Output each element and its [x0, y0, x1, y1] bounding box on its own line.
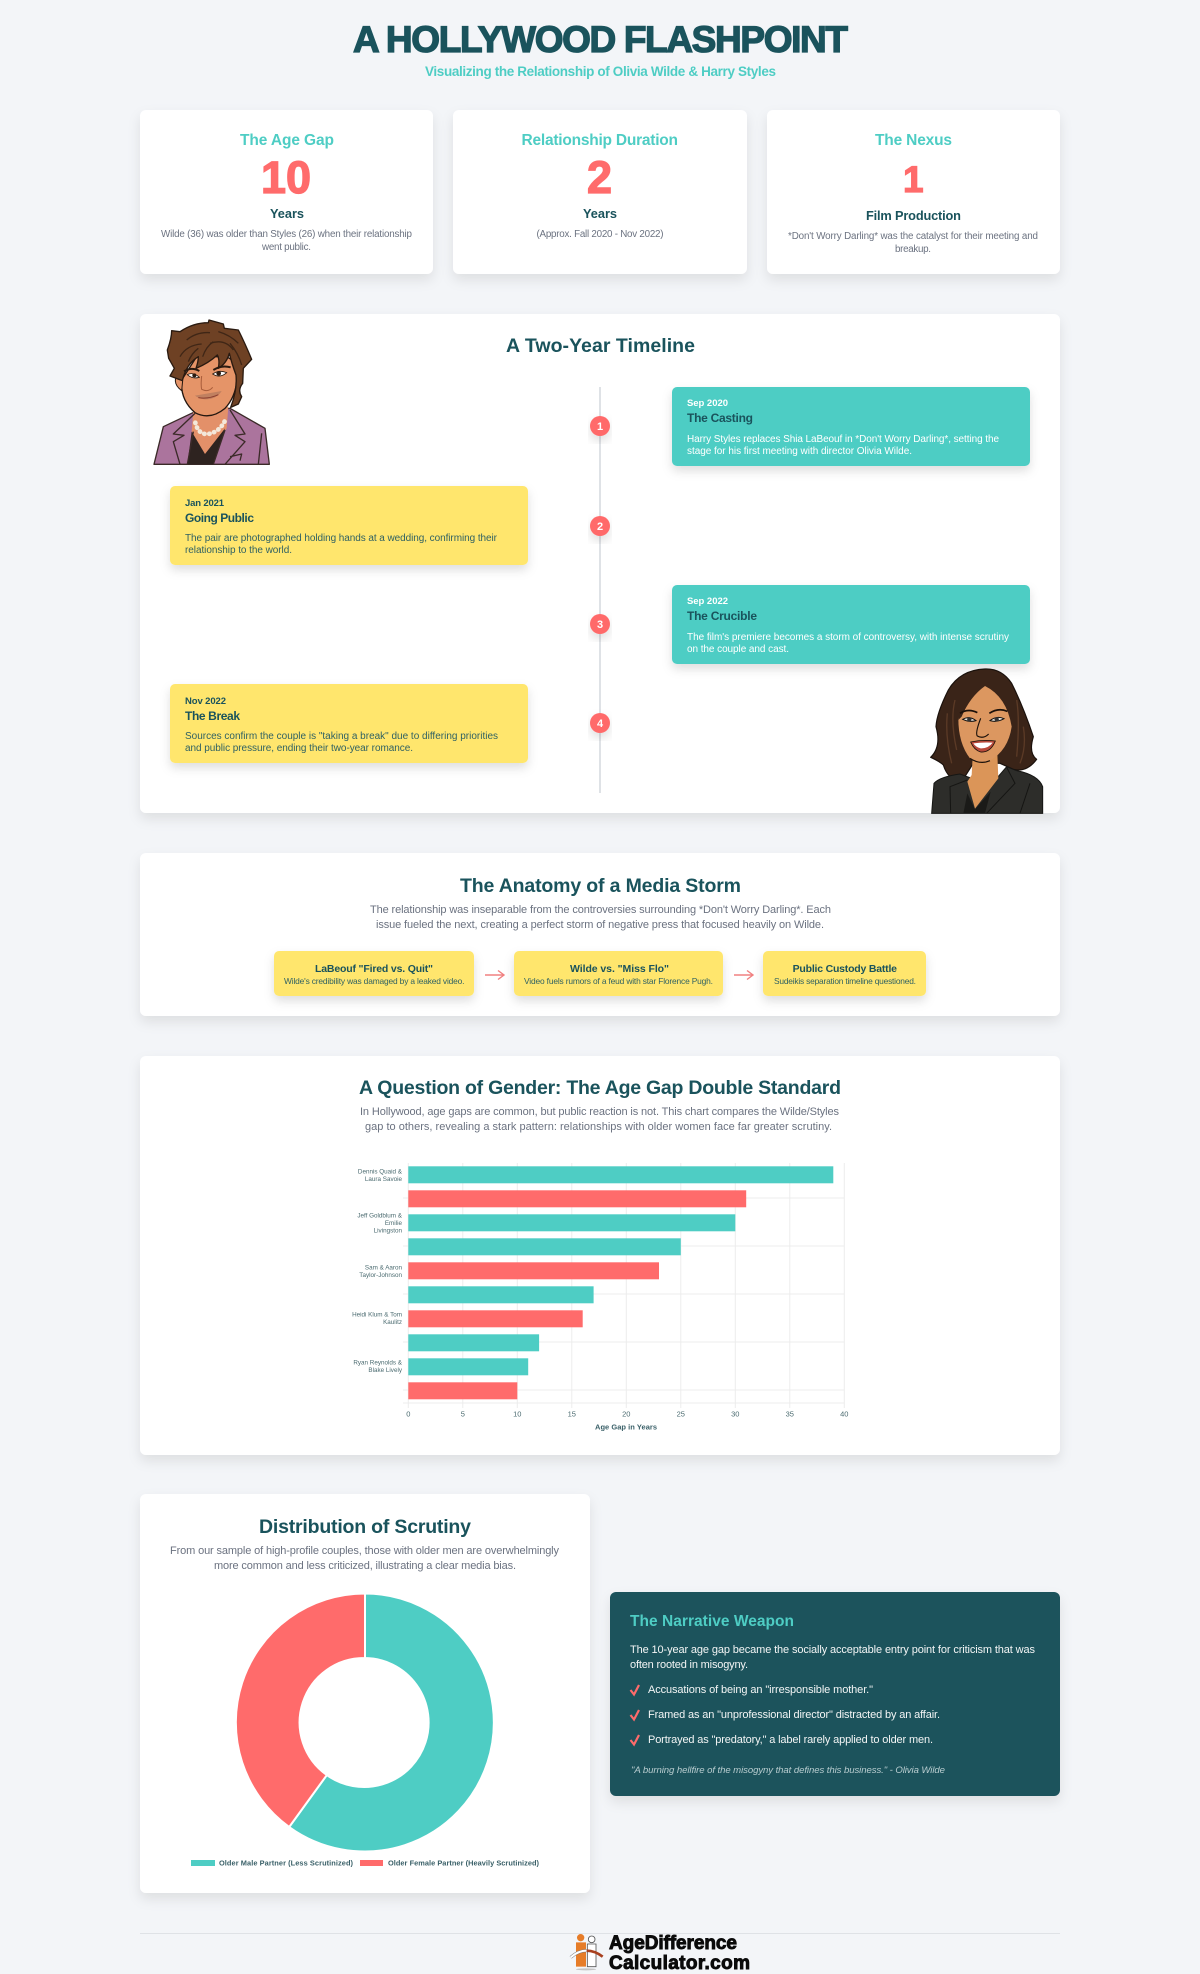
timeline event 1: the casting: The Casting — [687, 411, 753, 425]
timeline event 3: the crucible: The Crucible — [687, 609, 757, 623]
timeline event 3: the crucible: The film's premiere becomes a storm of controversy, with intense scrutiny — [687, 632, 1009, 643]
icon: Olivia Wilde cartoon portrait — [931, 669, 1043, 813]
timeline marker 2 — [590, 516, 610, 536]
flow box: Wilde vs Miss Flo: Video fuels rumors of a feud with star Florence Pugh. — [524, 976, 713, 986]
stat card: the nexus — [767, 110, 1060, 274]
narrative heading: The Narrative Weapon — [630, 1613, 794, 1630]
panel: timeline — [140, 314, 1060, 813]
donut legend: Older Male Partner (Less Scrutinized) — [219, 1858, 354, 1868]
timeline marker 3 — [590, 614, 610, 634]
x axis labels: 10 — [513, 1410, 521, 1418]
bullet: irresponsible mother: Accusations of being an "irresponsible mother." — [648, 1684, 873, 1696]
stat card: relationship duration: (Approx. Fall 2020 - Nov 2022) — [536, 229, 664, 240]
timeline marker 1 — [590, 416, 610, 436]
donut legend — [191, 1858, 540, 1868]
flow box: LaBeouf fired vs quit — [274, 951, 474, 996]
timeline event 1: the casting: Sep 2020 — [687, 398, 728, 409]
couple labels: Sam & Aaron — [365, 1264, 402, 1272]
couple labels — [352, 1168, 403, 1374]
distribution intro text: From our sample of high-profile couples, those with older men are overwhelmingly — [170, 1545, 560, 1557]
couple labels: Ryan Reynolds & — [353, 1360, 403, 1366]
quote: "A burning hellfire of the misogyny that defines this business." - Olivia Wilde — [631, 1765, 945, 1776]
flow box: LaBeouf fired vs quit: Wilde's credibility was damaged by a leaked video. — [284, 976, 464, 986]
couple labels: Jeff Goldblum & — [357, 1212, 403, 1220]
arrow — [485, 970, 504, 980]
narrative paragraph: The 10-year age gap became the socially acceptable entry point for criticism that was — [630, 1644, 1036, 1656]
stat card: the age gap: The Age Gap — [240, 132, 334, 149]
bar chart — [352, 1163, 848, 1432]
couple labels: Laura Savoie — [365, 1176, 402, 1183]
timeline event 2: going public: Jan 2021 — [185, 498, 225, 509]
timeline event 3: the crucible: on the couple and cast. — [687, 644, 789, 655]
stat card: the nexus: The Nexus — [875, 132, 952, 149]
couple labels: Kaulitz — [383, 1319, 402, 1326]
x axis labels: 15 — [568, 1410, 576, 1418]
couple labels: Taylor-Johnson — [359, 1272, 402, 1279]
panel: age gap double standard — [140, 1056, 1060, 1455]
timeline heading: A Two-Year Timeline — [506, 335, 695, 357]
narrative paragraph: often rooted in misogyny. — [630, 1659, 748, 1671]
donut legend: Older Female Partner (Heavily Scrutinized) — [388, 1858, 540, 1868]
x axis labels: 35 — [786, 1410, 794, 1418]
double standard intro text: gap to others, revealing a stark pattern: relationships with older women face far greater scrutiny. — [365, 1121, 832, 1133]
flow box: Wilde vs Miss Flo — [514, 951, 723, 996]
narrative paragraph — [630, 1644, 1036, 1671]
timeline marker 2: 2 — [597, 521, 603, 533]
stat card: the age gap: 10 — [261, 152, 311, 203]
flow box: LaBeouf fired vs quit: LaBeouf "Fired vs. Quit" — [315, 963, 433, 975]
panel: distribution of scrutiny — [140, 1494, 590, 1893]
x axis labels: 30 — [731, 1410, 739, 1418]
couple labels: Heidi Klum & Tom — [352, 1312, 402, 1318]
double standard intro text — [360, 1106, 840, 1133]
timeline marker 1: 1 — [597, 421, 603, 433]
title: A HOLLYWOOD FLASHPOINT — [353, 19, 848, 60]
footer logo: Calculator.com — [609, 1953, 750, 1974]
timeline event 4: the break: Nov 2022 — [185, 696, 226, 707]
x axis labels: 0 — [406, 1410, 410, 1418]
stat card: the age gap: went public. — [261, 242, 311, 253]
flow box: public custody battle: Public Custody Battle — [793, 963, 897, 975]
x axis labels: 40 — [840, 1410, 848, 1418]
stat card: the nexus: 1 — [903, 159, 924, 200]
stat card: the age gap: Years — [270, 206, 304, 221]
stat card: the nexus: Film Production — [866, 208, 961, 223]
stat card: relationship duration: 2 — [587, 152, 612, 203]
double standard intro text: In Hollywood, age gaps are common, but public reaction is not. This chart compares the Wilde/Styles — [360, 1106, 840, 1118]
timeline event 1: the casting: Harry Styles replaces Shia LaBeouf in *Don't Worry Darling*, setting the — [687, 434, 999, 445]
couple labels: Blake Lively — [368, 1367, 403, 1374]
panel: the narrative weapon — [610, 1592, 1060, 1796]
timeline event 2: going public: relationship to the world. — [185, 545, 292, 556]
distribution heading: Distribution of Scrutiny — [259, 1516, 471, 1538]
donut chart — [236, 1593, 494, 1852]
media storm intro text: issue fueled the next, creating a perfect storm of negative press that focused heavily on Wilde. — [376, 919, 824, 931]
stat card: relationship duration — [453, 110, 747, 274]
couple labels: Emilie — [385, 1220, 402, 1227]
flow box: public custody battle: Sudeikis separation timeline questioned. — [774, 976, 916, 986]
timeline marker 3: 3 — [597, 619, 603, 631]
timeline event 1: the casting: stage for his first meeting with director Olivia Wilde. — [687, 446, 912, 457]
couple labels: Dennis Quaid & — [358, 1168, 403, 1176]
double standard heading: A Question of Gender: The Age Gap Double Standard — [359, 1077, 841, 1099]
icon: Harry Styles cartoon portrait — [154, 320, 269, 464]
footer logo: AgeDifference — [609, 1933, 737, 1954]
subtitle: Visualizing the Relationship of Olivia Wilde & Harry Styles — [425, 64, 776, 79]
arrow — [734, 970, 753, 980]
footer logo — [571, 1933, 750, 1974]
stat card: relationship duration: Relationship Duration — [522, 132, 678, 149]
distribution intro text: more common and less criticized, illustrating a clear media bias. — [214, 1560, 516, 1572]
stat card: the age gap — [140, 110, 433, 274]
stat card: the age gap: Wilde (36) was older than Styles (26) when their relationship — [161, 229, 413, 240]
timeline event 2: going public — [170, 486, 528, 565]
distribution intro text — [170, 1545, 560, 1572]
couple labels: Livingston — [374, 1228, 402, 1234]
flow box: public custody battle — [763, 951, 926, 996]
panel: anatomy of a media storm — [140, 853, 1060, 1016]
media storm intro text — [370, 904, 831, 931]
x axis labels: 5 — [461, 1410, 465, 1418]
icon: two people logo — [571, 1934, 603, 1970]
bars — [408, 1166, 833, 1399]
bullet: predatory: Portrayed as "predatory," a label rarely applied to older men. — [648, 1734, 933, 1746]
bullet: unprofessional director: Framed as an "unprofessional director" distracted by an affair. — [648, 1709, 940, 1721]
timeline marker 4 — [590, 713, 610, 733]
timeline event 4: the break — [170, 684, 528, 763]
media storm heading: The Anatomy of a Media Storm — [460, 875, 741, 897]
timeline event 4: the break: The Break — [185, 709, 240, 723]
x axis labels: 20 — [622, 1410, 630, 1418]
x axis labels — [406, 1410, 848, 1418]
timeline event 4: the break: Sources confirm the couple is "taking a break" due to differing priorities — [185, 731, 498, 742]
stat card: relationship duration: Years — [583, 206, 617, 221]
stat card: the nexus: breakup. — [895, 244, 931, 255]
timeline event 1: the casting — [672, 387, 1030, 466]
timeline event 3: the crucible: Sep 2022 — [687, 596, 728, 607]
timeline marker 4: 4 — [597, 718, 604, 730]
x axis title: Age Gap in Years — [595, 1422, 657, 1432]
timeline event 2: going public: Going Public — [185, 511, 254, 525]
timeline event 3: the crucible — [672, 585, 1030, 664]
flow box: Wilde vs Miss Flo: Wilde vs. "Miss Flo" — [570, 963, 669, 975]
media storm intro text: The relationship was inseparable from the controversies surrounding *Don't Worry Darling*. Each — [370, 904, 831, 916]
timeline event 4: the break: and public pressure, ending their two-year romance. — [185, 743, 413, 754]
timeline event 2: going public: The pair are photographed holding hands at a wedding, confirming their — [185, 533, 498, 544]
stat card: the nexus: *Don't Worry Darling* was the catalyst for their meeting and — [788, 231, 1038, 242]
x axis labels: 25 — [677, 1410, 685, 1418]
